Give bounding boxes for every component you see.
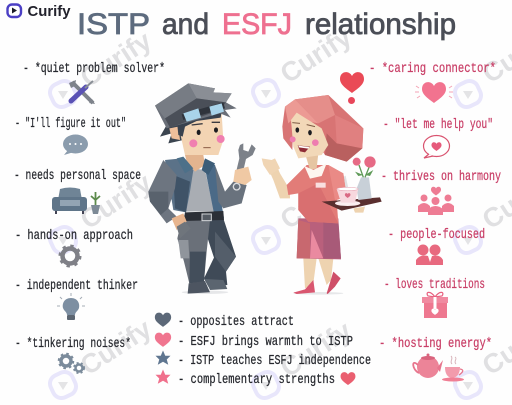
icon: glowing heart — [415, 82, 453, 103]
legs — [177, 218, 236, 294]
legs and shoes — [293, 258, 341, 294]
icon: teapot and cup — [413, 354, 464, 382]
legend item: opposites attract: - opposites attract — [178, 314, 294, 330]
title — [77, 8, 456, 41]
icon: speech bubble with heart — [424, 136, 450, 158]
legend item: complementary strengths: - complementary strengths — [178, 372, 335, 388]
hair and cap — [155, 83, 237, 128]
goggles — [182, 102, 225, 122]
legend — [155, 313, 371, 388]
legend item: ESFJ brings warmth: - ESFJ brings warmth to ISTP — [178, 334, 353, 350]
title: relationship — [305, 8, 456, 41]
watermarks: Curify — [275, 21, 357, 89]
trait: I'll figure it out: - "I'll figure it out" — [15, 116, 126, 132]
title: ESFJ — [222, 8, 292, 41]
icon: gift box — [422, 292, 448, 318]
logo: Curify — [8, 3, 71, 20]
head — [160, 112, 225, 155]
neck, collar and name tag — [305, 153, 318, 170]
floating heart and dot — [340, 72, 364, 104]
icon: speech bubble — [63, 134, 88, 155]
jacket — [287, 165, 347, 223]
trait: hands-on approach: - hands-on approach — [15, 228, 133, 244]
legend item: ISTP teaches independence — [156, 350, 371, 369]
legend item: ESFJ brings warmth — [155, 333, 353, 350]
ESFJ trait list — [369, 61, 501, 382]
icon: light bulb — [57, 293, 85, 320]
icon: two gears — [59, 354, 84, 373]
icon: gear — [60, 246, 80, 266]
wrench — [233, 143, 256, 185]
watermarks: Curify — [275, 167, 357, 235]
logo: Curify: Curify — [28, 3, 71, 20]
watermarks: Curify — [275, 315, 357, 383]
title: ISTP — [77, 8, 150, 41]
hair back — [282, 95, 363, 162]
torso — [165, 158, 224, 221]
trait: independent thinker: - independent thinker — [15, 278, 138, 294]
ISTP trait list — [14, 61, 165, 373]
legend item: ISTP teaches independence: - ISTP teaches ESFJ independence — [178, 353, 371, 369]
watermarks: Curify — [75, 167, 157, 235]
icon: two people — [416, 244, 443, 265]
arms — [148, 160, 252, 238]
icon: group with heart — [418, 187, 454, 215]
legend item: complementary strengths — [156, 370, 355, 388]
legend item: opposites attract — [155, 313, 294, 330]
trait: needs personal space: - needs personal space — [14, 168, 141, 184]
skirt — [297, 218, 341, 259]
trait: quiet problem solver: - *quiet problem solver* — [23, 61, 165, 77]
character: ESFJ — [262, 95, 382, 295]
title: and — [162, 8, 209, 41]
icon: wrench and screwdriver — [69, 80, 95, 104]
icon: armchair and plant — [52, 188, 100, 214]
tray with cup and flowers — [322, 156, 382, 213]
character: ISTP — [148, 83, 256, 294]
neck and collar — [185, 155, 205, 172]
face — [290, 113, 328, 158]
trait: tinkering noises: - *tinkering noises* — [15, 336, 131, 352]
left arm — [262, 158, 290, 198]
watermarks: Curify — [75, 313, 157, 381]
watermarks: Curify — [75, 25, 157, 93]
